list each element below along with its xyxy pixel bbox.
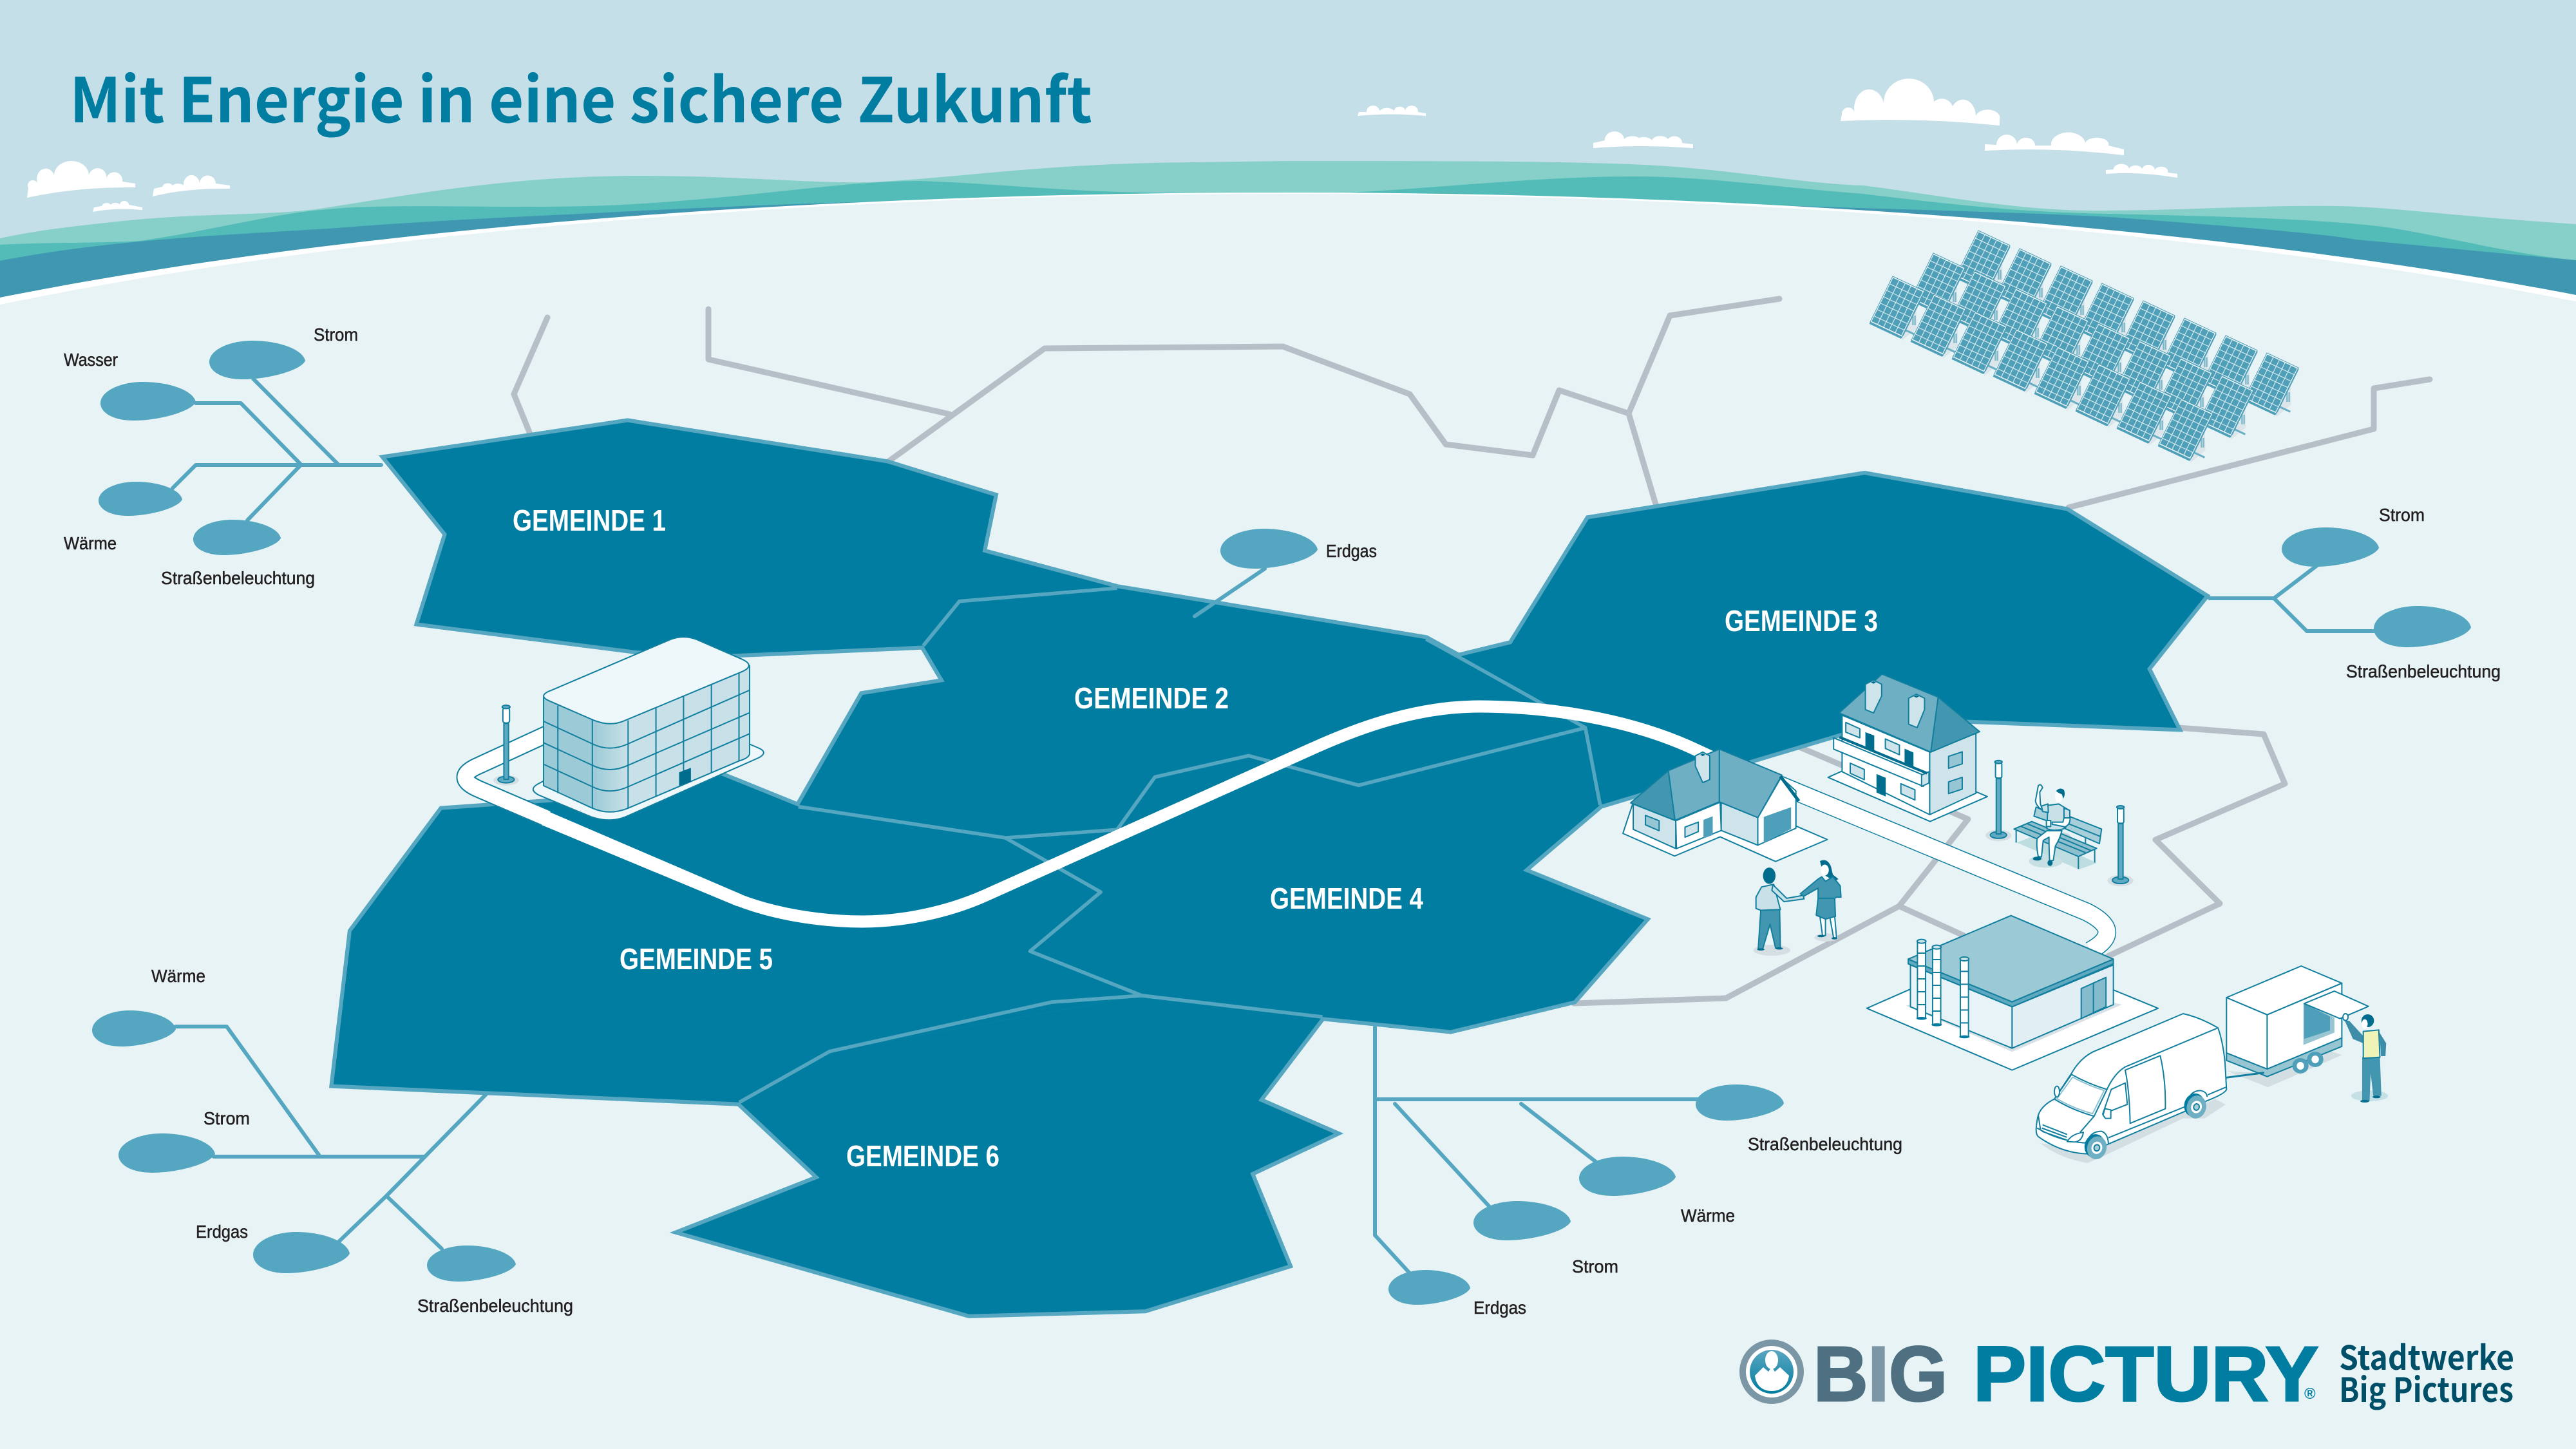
clouds: [27, 79, 2177, 212]
logo: Big Picture: [1739, 1330, 2514, 1417]
company name: Big Pictures: [2339, 1363, 2514, 1412]
network labels: Erdgas: [1326, 541, 1377, 561]
region dividers: [739, 588, 1600, 1103]
network labels: Erdgas: [1473, 1298, 1526, 1318]
person: woman shaking hands: [1801, 860, 1841, 942]
network labels: Strom: [314, 325, 358, 345]
network labels: Wärme: [1681, 1206, 1735, 1226]
title: Mit Energie in eine sichere Zukunft: [70, 51, 1092, 140]
illustration: houses and people: [1623, 674, 2134, 956]
municipality labels: GEMEINDE 3: [1725, 604, 1878, 638]
leaf: Straßenbeleuchtung bottom centre: [1696, 1084, 1784, 1121]
van shadow: [2040, 1099, 2226, 1163]
network labels: Straßenbeleuchtung: [1748, 1134, 1902, 1154]
network labels: Straßenbeleuchtung: [161, 568, 315, 588]
illustration: van: [2036, 1014, 2226, 1163]
Erdgas branch: [1195, 529, 1318, 616]
network labels: Strom: [204, 1108, 250, 1128]
roof: [544, 637, 749, 724]
municipality labels: GEMEINDE 4: [1270, 882, 1423, 915]
van body: [2036, 1014, 2226, 1154]
municipality labels: GEMEINDE 6: [846, 1139, 999, 1173]
leaf: Strom bottom left: [118, 1133, 215, 1173]
leaf: Erdgas bottom centre: [1388, 1270, 1470, 1305]
small house: [1623, 749, 1827, 862]
platform: [533, 744, 764, 820]
plant building: [1908, 916, 2114, 1048]
illustration: office building with lamp: [493, 637, 764, 820]
bench back: [2034, 807, 2101, 844]
network: right: [2210, 527, 2471, 647]
seated man: [2029, 785, 2070, 867]
lamp post: [493, 705, 519, 786]
illustration: heating plant and trailer: [1867, 916, 2388, 1103]
leaf: Erdgas top: [1220, 529, 1318, 569]
sky background: [0, 0, 2576, 335]
hills landscape: [0, 161, 2576, 335]
company name: [2339, 1331, 2514, 1412]
leaf: Strom: [209, 341, 305, 379]
network labels: Wasser: [64, 350, 118, 370]
network labels: Wärme: [64, 533, 117, 553]
region: Gemeinde 1: [386, 422, 1117, 654]
company name: Stadtwerke: [2339, 1331, 2514, 1379]
registered mark: ®: [2304, 1385, 2316, 1403]
plant pad: [1867, 990, 2158, 1070]
logo wordmark BIG: BIG: [1814, 1330, 1947, 1417]
network: bottom centre: [1375, 1027, 1784, 1305]
leaf: Wärme bottom centre: [1579, 1157, 1676, 1196]
logo wordmark PICTURY: PICTURY: [1973, 1330, 2318, 1417]
leaf: Straßenbeleuchtung: [193, 520, 281, 555]
municipality labels: GEMEINDE 5: [620, 942, 773, 976]
leaf: Erdgas bottom left: [253, 1232, 350, 1273]
building walls: [544, 665, 750, 812]
network labels: Straßenbeleuchtung: [417, 1296, 573, 1316]
leaf: Strom bottom centre: [1473, 1201, 1571, 1240]
network: bottom left: [92, 1010, 516, 1282]
person: man at trailer: [2343, 1014, 2388, 1103]
municipality labels: GEMEINDE 2: [1074, 681, 1229, 715]
solar panel field: [1868, 231, 2309, 468]
bench shadow: [2017, 835, 2097, 869]
leaf: Wärme bottom left: [92, 1010, 176, 1046]
network labels: Straßenbeleuchtung: [2346, 661, 2501, 681]
leaf: Straßenbeleuchtung right: [2374, 606, 2471, 647]
municipality labels: [513, 504, 1878, 1173]
network: top left: [99, 341, 381, 555]
chimneys: [1917, 940, 1969, 1038]
grey supply lines: [514, 299, 2430, 1003]
network labels: Strom: [1572, 1256, 1618, 1276]
region: Gemeinde 3: [1457, 475, 2204, 805]
door: [679, 768, 691, 786]
network labels: Strom: [2379, 505, 2425, 525]
leaf: Wärme: [99, 482, 182, 516]
trailer: [2226, 966, 2369, 1087]
leaf: Straßenbeleuchtung bottom left: [427, 1245, 516, 1282]
illustration: bench with seated man: [2014, 785, 2101, 869]
network labels: [64, 325, 2501, 1318]
region: Gemeinde 6: [682, 996, 1334, 1314]
leaf: Wasser: [100, 382, 196, 421]
van wheels: [2082, 1091, 2209, 1162]
network labels: Erdgas: [196, 1222, 248, 1242]
region: Gemeinde 5: [334, 775, 1142, 1103]
region fills: [334, 422, 2204, 1314]
region: Gemeinde 4: [1005, 728, 1645, 1030]
lamp posts: [1985, 761, 2134, 886]
white road: [465, 706, 2107, 951]
person: man shaking hands: [1754, 867, 1804, 956]
region: Gemeinde 2: [799, 588, 1586, 838]
van windows and doors: [2037, 1028, 2226, 1144]
logo emblem: [1739, 1340, 1804, 1404]
leaf: Strom right: [2282, 527, 2379, 567]
bench seat: [2014, 822, 2097, 869]
municipality labels: GEMEINDE 1: [513, 504, 666, 537]
tall house: [1828, 674, 1987, 822]
network labels: Wärme: [151, 966, 205, 986]
municipalities map: [334, 422, 2204, 1314]
